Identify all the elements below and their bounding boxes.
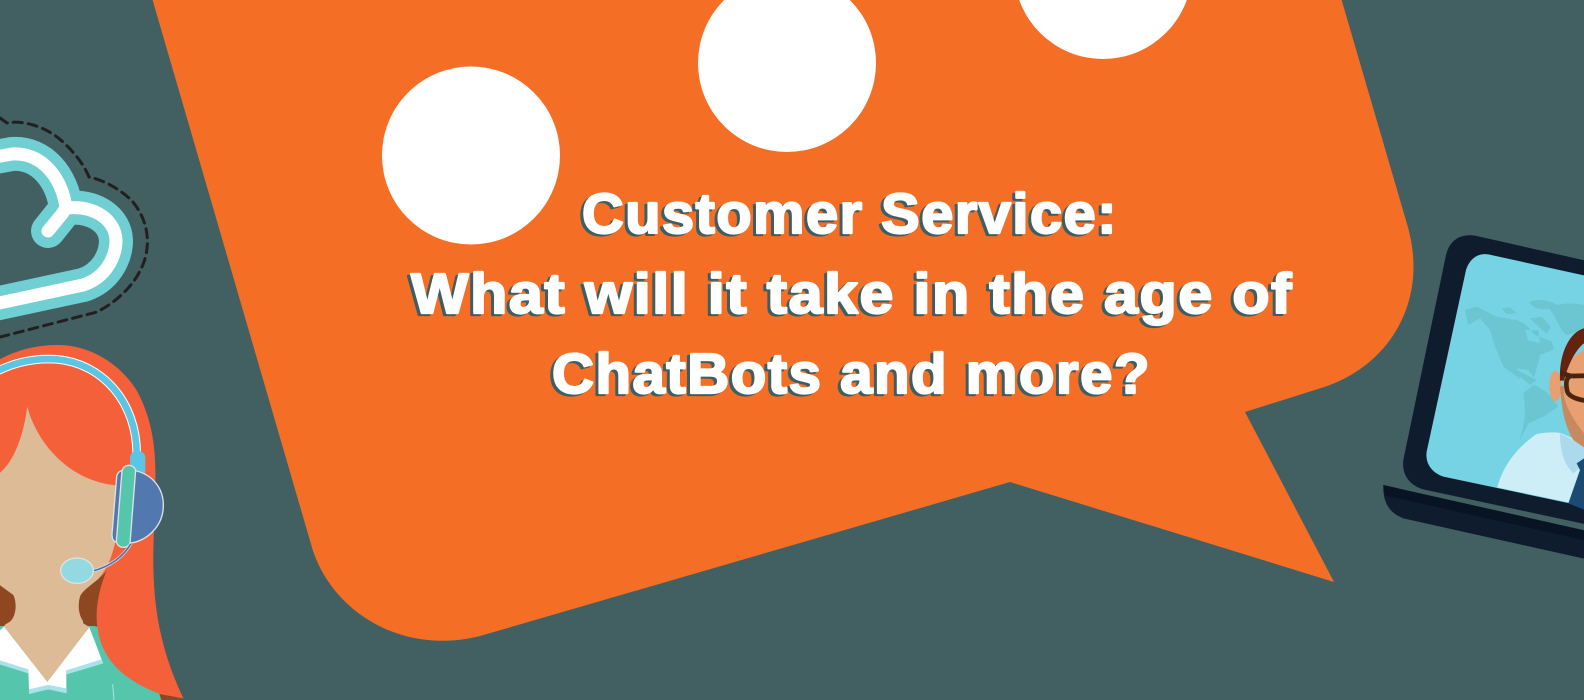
tie	[1568, 458, 1584, 513]
title: Customer Service:	[582, 182, 1118, 246]
speech bubble	[152, 0, 1414, 641]
world map	[1465, 300, 1584, 443]
ear cup	[112, 470, 163, 543]
hair shadow right	[79, 571, 107, 627]
microphone	[61, 558, 93, 583]
character: woman with headset	[0, 345, 183, 700]
man's face	[1563, 327, 1584, 460]
screen	[1426, 254, 1584, 514]
hair lock front	[97, 570, 183, 700]
shirt collar	[1560, 433, 1584, 473]
hair shadow left	[0, 584, 16, 626]
collar	[0, 627, 103, 694]
glasses	[1561, 373, 1584, 402]
ear pad	[116, 465, 136, 547]
mic arm	[93, 544, 131, 571]
typing dot 1	[382, 66, 560, 244]
man's ear	[1549, 371, 1561, 401]
icon: laptop with video call	[1383, 235, 1584, 567]
icon: cloud	[0, 118, 147, 337]
headset band	[0, 359, 137, 453]
title: What will it take in the age of	[411, 262, 1293, 326]
typing dot 2	[698, 0, 876, 152]
hair	[0, 345, 183, 700]
laptop base	[1383, 485, 1584, 567]
typing dot 3	[1014, 0, 1192, 59]
title	[411, 182, 1293, 406]
laptop lid	[1403, 235, 1584, 532]
man's shirt	[1497, 432, 1584, 513]
shirt	[0, 626, 161, 700]
title: ChatBots and more?	[552, 342, 1151, 406]
man's neck and jaw	[1560, 370, 1584, 460]
face and neck	[0, 407, 117, 682]
man's hair	[1560, 323, 1584, 381]
